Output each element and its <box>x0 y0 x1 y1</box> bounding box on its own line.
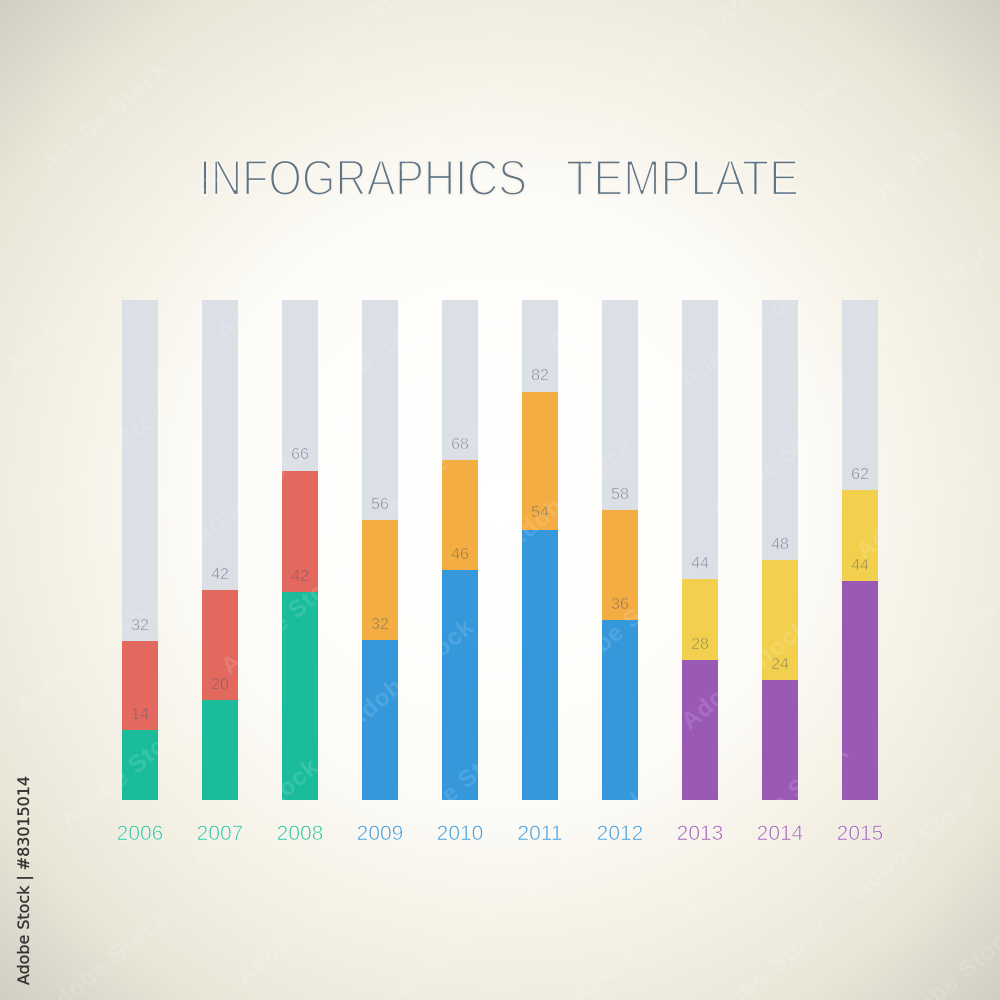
stock id text: Adobe Stock | #83015014 <box>14 776 33 985</box>
bar 2009 <box>362 300 398 800</box>
watermarks: Adobe Stock <box>211 223 349 345</box>
year labels: 2010 <box>437 822 483 845</box>
watermarks: Adobe Stock <box>216 558 354 680</box>
watermarks: Adobe Stock <box>551 568 689 690</box>
bar 2009: 32 <box>371 616 389 633</box>
watermarks: Adobe Stock <box>716 63 854 185</box>
watermarks: Adobe Stock <box>706 403 844 525</box>
bar 2010: 68 <box>451 436 469 453</box>
bar 2006 <box>122 300 158 800</box>
title: TEMPLATE <box>566 150 799 206</box>
year labels <box>117 822 883 845</box>
watermarks: Adobe Stock <box>851 443 989 565</box>
watermarks: Adobe Stock <box>386 728 524 850</box>
watermarks: Adobe Stock <box>36 55 174 177</box>
watermarks: Adobe Stock <box>163 98 301 220</box>
watermarks: Adobe Stock <box>846 783 984 905</box>
year labels: 2012 <box>597 822 643 845</box>
bar 2011: 54 <box>531 504 549 521</box>
bar 2009: 56 <box>371 496 389 513</box>
bar chart <box>122 300 878 800</box>
year labels: 2013 <box>677 822 723 845</box>
year labels: 2014 <box>757 822 804 845</box>
watermarks: Adobe Stock <box>231 868 369 990</box>
watermarks: Adobe Stock <box>381 63 519 185</box>
watermarks: Adobe Stock <box>176 438 314 560</box>
watermarks: Adobe Stock <box>186 753 324 875</box>
year labels: 2006 <box>117 822 163 845</box>
bar 2007 <box>202 300 238 800</box>
bar 2012: 58 <box>611 486 629 503</box>
bar 2006: 32 <box>131 617 149 634</box>
bar 2015: 44 <box>851 557 869 574</box>
bar 2013: 44 <box>691 555 709 572</box>
bar 2008 <box>282 300 318 800</box>
bar 2014: 24 <box>771 656 789 673</box>
bar 2014: 48 <box>771 536 789 553</box>
watermarks: Adobe Stock <box>516 783 654 905</box>
bar 2010 <box>442 300 478 800</box>
watermarks: Adobe Stock <box>826 118 964 240</box>
bar 2013 <box>682 300 718 800</box>
bar 2012: 36 <box>611 596 629 613</box>
watermarks: Adobe Stock <box>501 433 639 555</box>
year labels: 2009 <box>357 822 403 845</box>
watermarks: Adobe Stock <box>376 398 514 520</box>
bar 2011 <box>522 300 558 800</box>
bar 2010: 46 <box>451 546 469 563</box>
year labels: 2011 <box>517 822 563 845</box>
bar 2014 <box>762 300 798 800</box>
watermarks: Adobe Stock <box>341 613 479 735</box>
bar 2008: 66 <box>291 446 309 463</box>
bar 2008: 42 <box>291 568 309 585</box>
year labels: 2008 <box>277 822 323 845</box>
bar 2012 <box>602 300 638 800</box>
watermarks: Adobe Stock <box>336 268 474 390</box>
title: INFOGRAPHICS <box>199 150 527 206</box>
watermarks: Adobe Stock <box>676 273 814 395</box>
watermarks: Adobe Stock <box>1 258 139 380</box>
watermarks: Adobe Stock <box>496 108 634 230</box>
year labels: 2007 <box>197 822 243 845</box>
title <box>199 150 799 206</box>
watermarks: Adobe Stock <box>541 233 679 355</box>
watermarks: Adobe Stock <box>716 738 854 860</box>
bar 2015 <box>842 300 878 800</box>
bar 2007: 42 <box>211 566 229 583</box>
watermarks: Adobe Stock <box>676 613 814 735</box>
watermarks: Adobe Stock <box>56 713 194 835</box>
bar 2013: 28 <box>691 636 709 653</box>
watermarks: Adobe Stock <box>46 388 184 510</box>
bar 2011: 82 <box>531 367 549 384</box>
bar 2007: 20 <box>211 676 229 693</box>
bar 2006: 14 <box>131 706 149 723</box>
watermarks: Adobe Stock <box>11 598 149 720</box>
bar 2015: 62 <box>851 466 869 483</box>
year labels: 2015 <box>837 822 883 845</box>
